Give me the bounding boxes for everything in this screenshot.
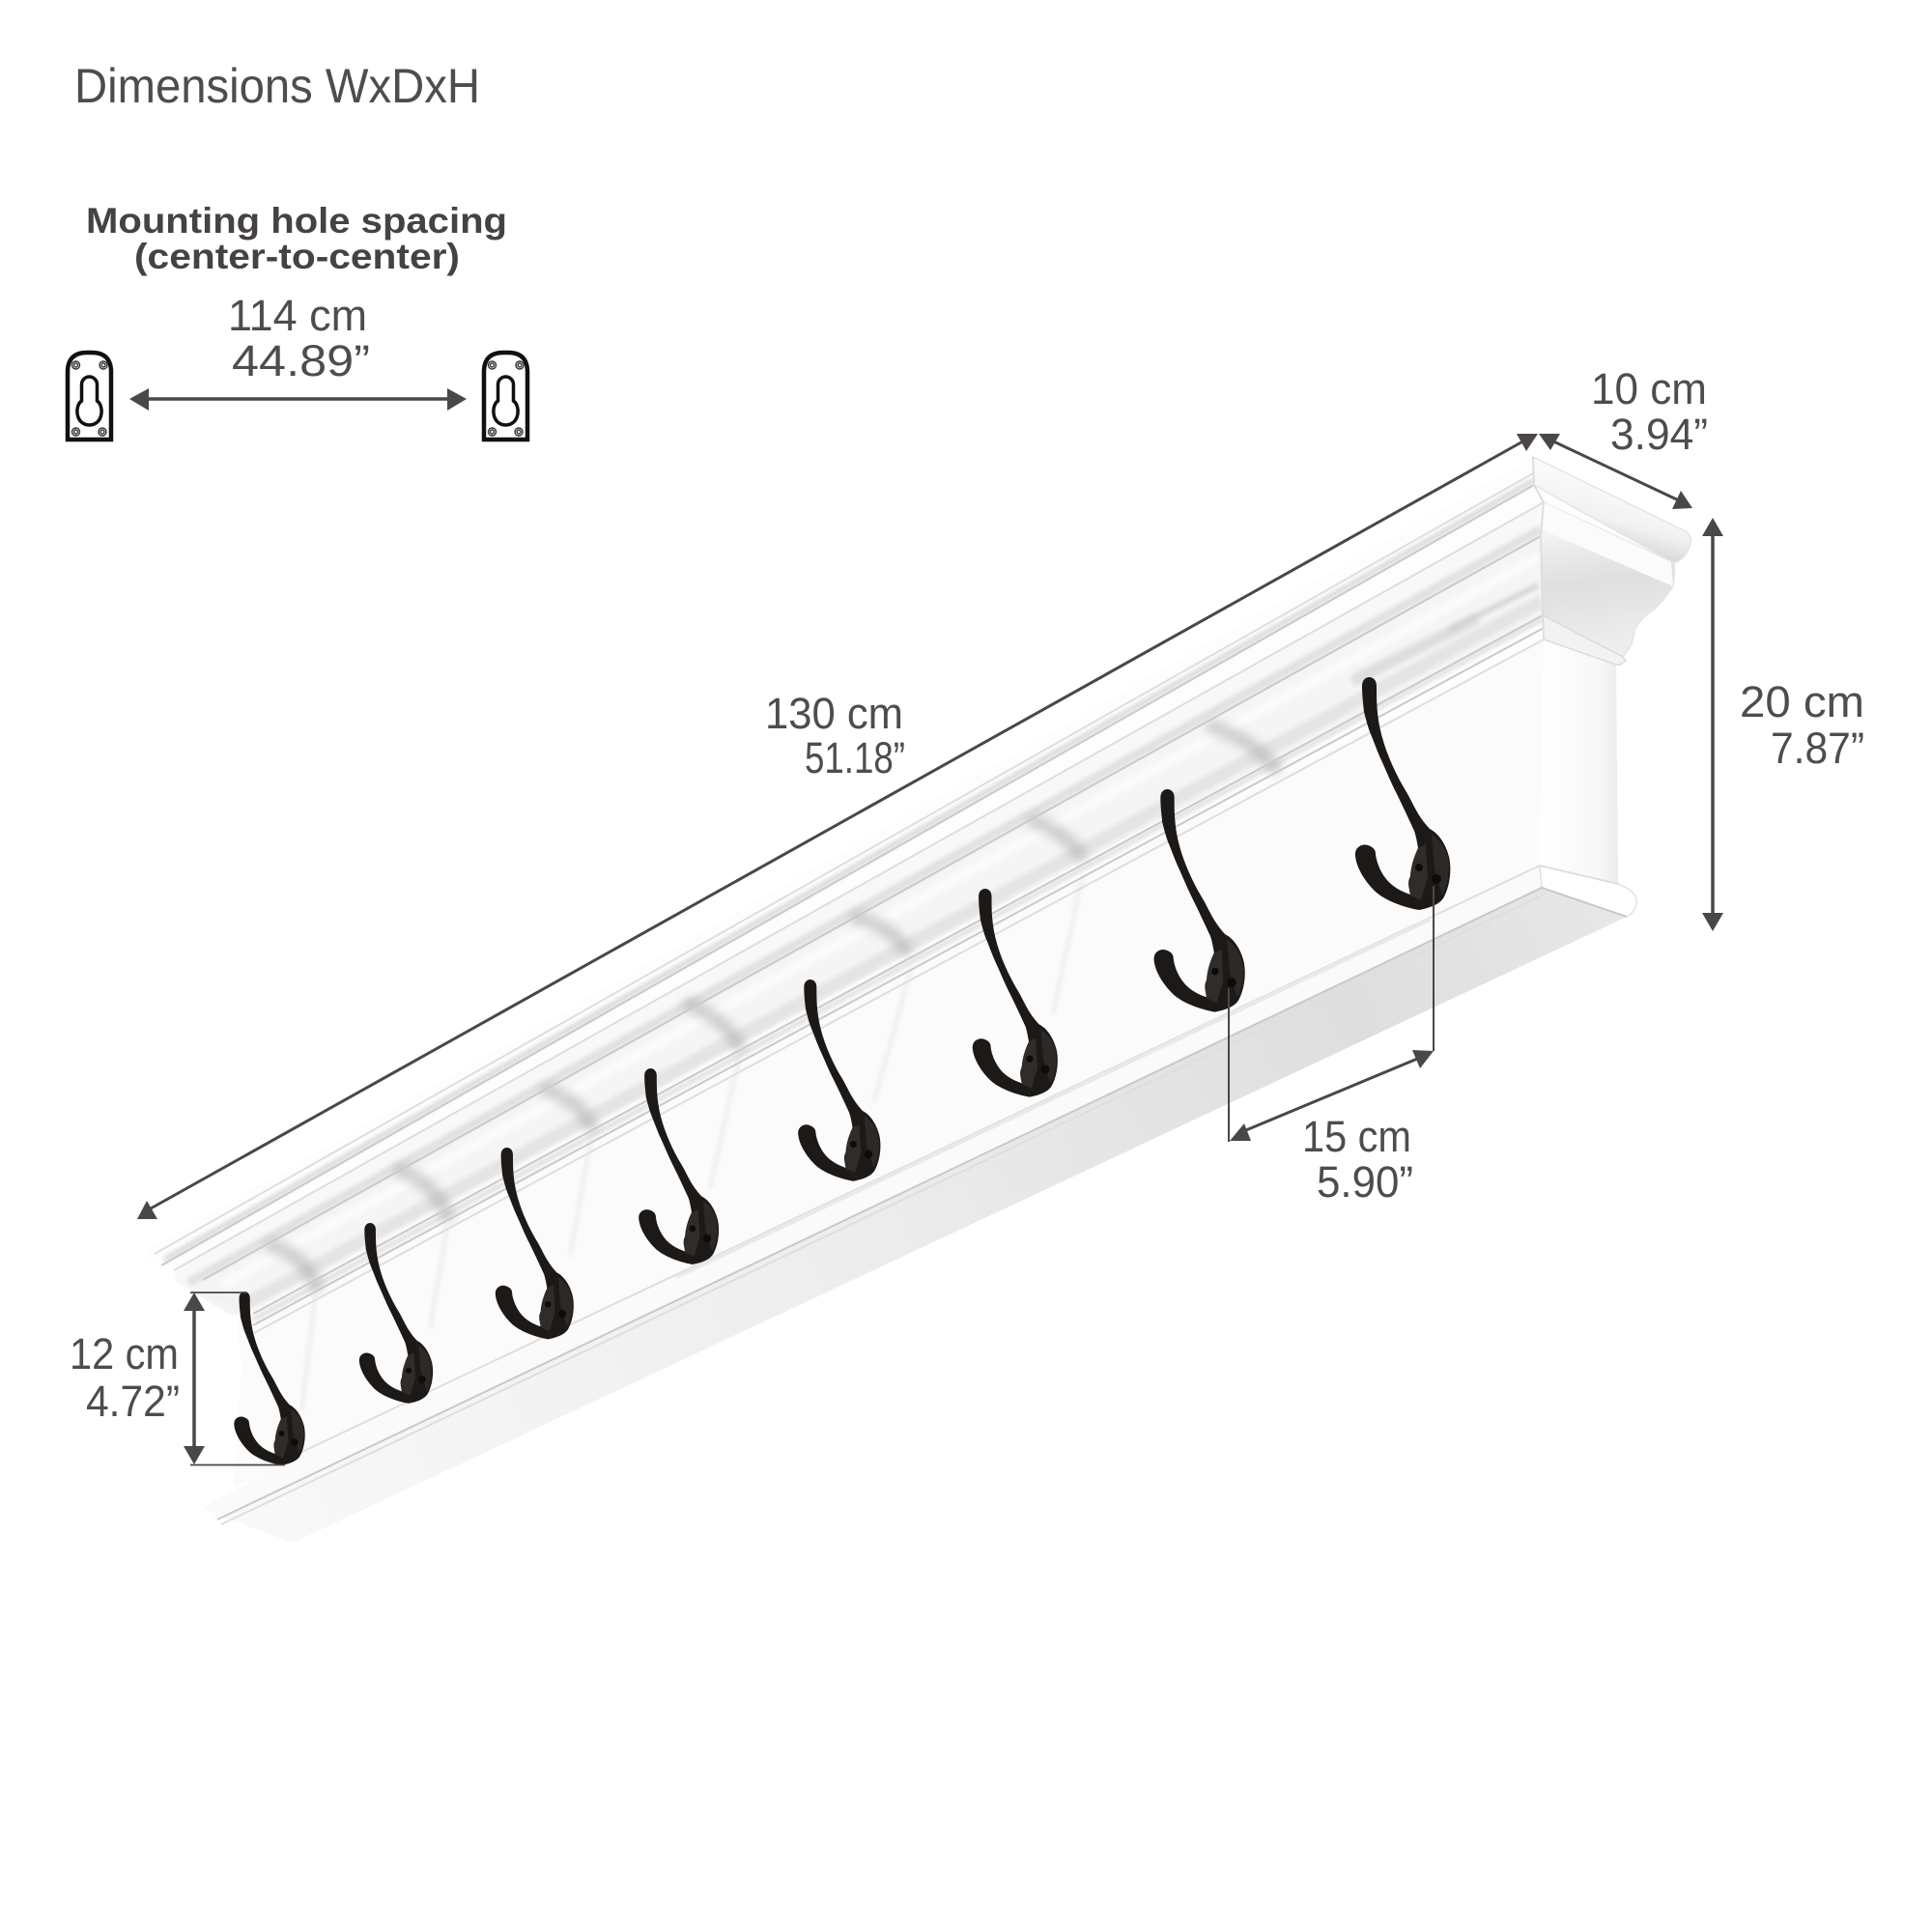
smudges on cornice bbox=[272, 727, 1275, 1285]
shelf crown bbox=[145, 457, 1690, 1317]
arrow: length 130 cm bbox=[137, 434, 1538, 1219]
label: 20 cm: 20 cm bbox=[1740, 677, 1864, 726]
hook 7 bbox=[1154, 789, 1245, 1012]
heading: mounting hole spacing: Mounting hole spacing bbox=[86, 201, 507, 241]
faint hook shadows bbox=[301, 869, 1084, 1410]
shelf base right end bbox=[1540, 866, 1636, 917]
hook 1 bbox=[234, 1292, 305, 1465]
label: 20 cm: 7.87” bbox=[1771, 724, 1864, 773]
label: 15 cm bbox=[1302, 1112, 1413, 1207]
crown right end: lip bbox=[1533, 457, 1690, 563]
arrow: hook height 12 cm bbox=[184, 1293, 285, 1464]
crown right end: cove bbox=[1541, 502, 1674, 657]
label: 12 cm bbox=[70, 1329, 180, 1426]
crown left underside bbox=[186, 1293, 246, 1317]
label: 114 cm bbox=[228, 291, 370, 385]
shelf base moulding and end bbox=[205, 866, 1636, 1543]
shelf base lines bbox=[217, 866, 1627, 1524]
crown lines bbox=[155, 457, 1544, 1333]
label: 130 cm bbox=[765, 689, 905, 782]
hook 6 bbox=[973, 889, 1058, 1097]
soft crown shading bbox=[164, 480, 1544, 1320]
cove bands bbox=[188, 536, 1543, 1316]
label: 130 cm: 51.18” bbox=[805, 733, 905, 782]
label: 10 cm: 3.94” bbox=[1610, 410, 1708, 459]
label: 10 cm: 10 cm bbox=[1591, 364, 1707, 413]
icon: left mounting bracket bbox=[68, 353, 111, 440]
label: 12 cm: 4.72” bbox=[86, 1377, 180, 1426]
label: 20 cm bbox=[1740, 677, 1864, 773]
panel: mounting hole spacing bbox=[68, 201, 527, 440]
hook 8 bbox=[1355, 677, 1450, 910]
label: 114 cm: 44.89” bbox=[232, 336, 370, 385]
arrow: mounting spacing bbox=[129, 388, 467, 411]
title: Dimensions WxDxH bbox=[74, 59, 480, 113]
label: 10 cm bbox=[1591, 364, 1708, 459]
highlight streak near right end bbox=[1352, 585, 1538, 681]
label: 15 cm: 5.90” bbox=[1317, 1157, 1413, 1207]
arrow: height 20 cm bbox=[1702, 518, 1723, 931]
label: 130 cm: 130 cm bbox=[765, 689, 903, 738]
label: 15 cm: 15 cm bbox=[1302, 1112, 1411, 1161]
hook 2 bbox=[359, 1223, 433, 1404]
hook 3 bbox=[496, 1148, 574, 1339]
shelf illustration bbox=[145, 457, 1690, 1543]
crown right end: upper cove band bbox=[1541, 502, 1673, 586]
crown right end: lower moulding bbox=[1543, 615, 1626, 665]
heading: mounting hole spacing bbox=[86, 201, 507, 276]
label: 114 cm: 114 cm bbox=[228, 291, 367, 340]
shelf right side of box bbox=[1540, 639, 1618, 884]
label: 12 cm: 12 cm bbox=[70, 1329, 179, 1378]
heading: mounting hole spacing: (center-to-center) bbox=[134, 237, 460, 276]
arrow: depth 10 cm bbox=[1539, 434, 1692, 509]
shelf box front face bbox=[234, 639, 1544, 1488]
hook 4 bbox=[639, 1068, 719, 1264]
icon: right mounting bracket bbox=[484, 353, 527, 440]
hook 5 bbox=[798, 980, 880, 1181]
arrow: hook spacing 15 cm bbox=[1229, 886, 1434, 1142]
shelf base bottom face bbox=[212, 888, 1627, 1543]
